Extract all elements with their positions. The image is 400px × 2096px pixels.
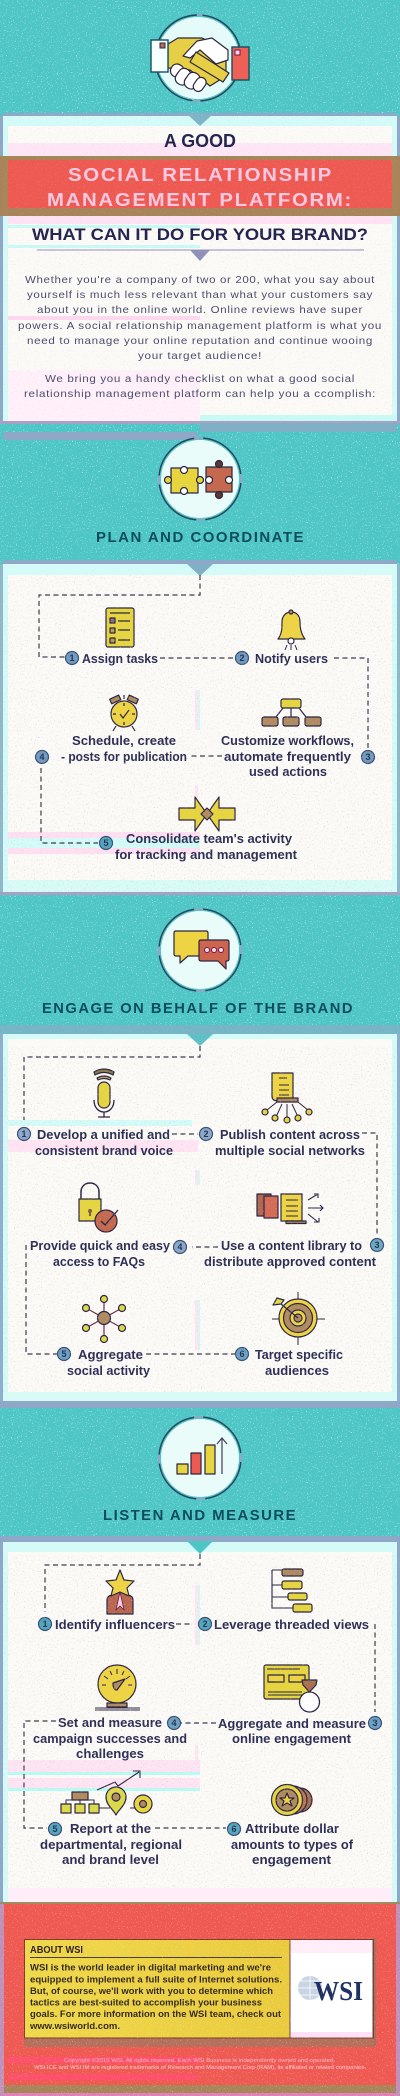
label: report at the departmental level: [40, 1821, 182, 1867]
text block: introduction: relationship management platform can help you a ccomplish:: [24, 388, 376, 400]
label: report at the departmental level: 5: [52, 1824, 58, 1834]
label: aggregate social activity: Aggregate: [78, 1347, 143, 1362]
text block: copyright: [34, 2057, 367, 2071]
heading: what can it do for your brand: [32, 225, 368, 261]
label: develop a unified brand voice: [18, 1127, 173, 1158]
banner: social relationship management platform: [0, 156, 400, 216]
label: aggregate social activity: social activity: [67, 1363, 151, 1378]
label: identify influencers: 1: [42, 1619, 48, 1629]
icon: handshake: [151, 11, 249, 105]
label: target specific audiences: audiences: [265, 1363, 329, 1378]
label: customize workflows: 3: [365, 752, 371, 762]
label: customize workflows: used actions: [249, 764, 327, 779]
label: attribute dollar amounts: engagement: [252, 1852, 332, 1867]
label: attribute dollar amounts: Attribute dollar: [245, 1821, 339, 1836]
connector: listen and measure: [24, 1554, 375, 1828]
icon: rising bar chart: [155, 1413, 245, 1503]
label: consolidate team's activity: 5: [103, 838, 109, 848]
label: provide quick and easy access: [30, 1238, 186, 1269]
label: leverage threaded views: 2: [202, 1619, 208, 1629]
label: attribute dollar amounts: [228, 1821, 354, 1867]
label: consolidate team's activity: for tracking and management: [115, 847, 298, 862]
label: target specific audiences: Target specific: [255, 1347, 343, 1362]
panel: footer: [0, 1902, 400, 2096]
text block: introduction: Whether you're a company of two or 200, what you say about: [25, 274, 375, 286]
label: aggregate social activity: [58, 1347, 151, 1378]
heading: plan and coordinate: PLAN AND COORDINATE: [96, 529, 305, 546]
label: publish content: multiple social networks: [215, 1143, 365, 1158]
icon: social hub: [82, 1296, 126, 1342]
icon: dollar coins: [272, 1784, 312, 1816]
banner: social relationship management platform: SOCIAL RELATIONSHIP: [68, 165, 333, 185]
connector: engage on behalf of the brand: [24, 1046, 377, 1354]
label: aggregate and measure: online engagement: [232, 1731, 352, 1746]
label: identify influencers: Identify influencers: [55, 1617, 175, 1632]
label: customize workflows: automate frequently: [224, 749, 352, 764]
label: leverage threaded views: Leverage threaded views: [214, 1617, 369, 1632]
panel: plan and coordinate: [0, 560, 400, 895]
icon: padlock with check: [79, 1183, 118, 1232]
heading: engage on behalf of the brand: ENGAGE ON BEHALF OF THE BRAND: [42, 1000, 354, 1017]
text block: introduction: about you in the online world. Online reviews have super: [37, 304, 363, 316]
label: publish content: 2: [203, 1129, 209, 1139]
icon: consolidating arrows: [179, 797, 235, 831]
label: set and measure: Set and measure: [58, 1715, 162, 1730]
label: customize workflows: [221, 733, 374, 779]
callout: about wsi: equipped to implement a full suite of Internet solutions.: [30, 1974, 282, 1986]
panel: engage on behalf of the brand: [0, 1025, 400, 1408]
label: report at the departmental level: Report at the: [70, 1821, 151, 1836]
label: provide quick and easy access: Provide quick and easy: [30, 1238, 171, 1253]
label: assign tasks: 1: [69, 653, 75, 663]
label: provide quick and easy access: access to FAQs: [53, 1254, 145, 1269]
label: set and measure: campaign successes and: [33, 1731, 187, 1746]
label: attribute dollar amounts: 6: [231, 1824, 237, 1834]
icon: chat bubbles: [155, 905, 245, 995]
label: schedule, create posts: - posts for publication: [61, 749, 187, 764]
connector: plan and coordinate: [39, 575, 368, 843]
icon: content library: [257, 1194, 323, 1224]
text block: introduction: yourself is much less relevant than what your customers say: [27, 289, 373, 301]
banner: social relationship management platform: MANAGEMENT PLATFORM:: [47, 190, 353, 210]
label: schedule, create posts: 4: [39, 752, 45, 762]
heading: listen and measure: LISTEN AND MEASURE: [103, 1507, 297, 1524]
callout: about wsi: [24, 1940, 374, 2038]
label: set and measure: [33, 1715, 187, 1761]
icon: microphone: [94, 1069, 114, 1117]
text block: introduction: need to manage your online reputation and continue wooing: [27, 335, 373, 347]
label: use a content library: distribute approved content: [204, 1254, 377, 1269]
text block: introduction: We bring you a handy checklist on what a good social: [45, 373, 355, 385]
text block: copyright: WSI ICE and WSI IM are registered trademarks of Research and Management Corp (RAM), its affiliated or related companies.: [34, 2065, 367, 2071]
icon: target with arrow: [272, 1292, 325, 1345]
label: assign tasks: Assign tasks: [82, 651, 158, 666]
heading: what can it do for your brand: WHAT CAN IT DO FOR YOUR BRAND?: [32, 225, 368, 244]
text block: introduction: [18, 274, 382, 400]
icon: workflow chart: [262, 699, 321, 726]
label: target specific audiences: [236, 1347, 343, 1378]
label: consolidate team's activity: Consolidate team's activity: [126, 831, 293, 846]
icon: threaded view: [272, 1569, 312, 1612]
logo: wsi: [290, 1940, 373, 2038]
icon: star influencer: [106, 1570, 134, 1614]
label: develop a unified brand voice: consistent brand voice: [35, 1143, 173, 1158]
icon: publishing document: [262, 1073, 312, 1123]
icon: checklist: [106, 608, 134, 647]
label: aggregate and measure: 3: [372, 1718, 378, 1728]
panel: introduction: [0, 113, 400, 424]
label: publish content: Publish content across: [220, 1127, 360, 1142]
heading: a good: A GOOD: [164, 131, 236, 151]
label: report at the departmental level: departmental, regional: [40, 1837, 182, 1852]
label: attribute dollar amounts: amounts to types of: [231, 1837, 354, 1852]
label: aggregate social activity: 5: [61, 1349, 67, 1359]
label: aggregate and measure: [218, 1716, 382, 1746]
icon: alarm clock: [110, 695, 138, 731]
label: customize workflows: Customize workflows,: [221, 733, 354, 748]
callout: about wsi: www.wsiworld.com.: [29, 2021, 120, 2032]
logo: wsi: WSI: [314, 1976, 363, 2006]
icon: bell: [278, 610, 305, 650]
callout: about wsi: ABOUT WSI: [30, 1945, 83, 1956]
icon: puzzle pieces: [3, 423, 397, 524]
callout: about wsi: goals. For more information on the WSI team, check out: [30, 2009, 282, 2020]
label: target specific audiences: 6: [239, 1349, 245, 1359]
label: consolidate team's activity: [100, 831, 298, 862]
text block: copyright: Copyright ©2015 WSI. All rights reserved. Each WSI Business is independently owned and operated.: [64, 2057, 336, 2064]
label: notify users: Notify users: [255, 651, 328, 666]
panel: listen and measure: [0, 1536, 400, 1902]
label: set and measure: 4: [171, 1718, 177, 1728]
icon: webpage with ring: [264, 1665, 320, 1712]
text block: introduction: powers. A social relationship management platform is what you: [18, 320, 382, 332]
text block: introduction: your target audience!: [138, 350, 262, 362]
callout: about wsi: WSI is the world leader in digital marketing and we're: [30, 1962, 271, 1974]
label: schedule, create posts: Schedule, create: [72, 733, 176, 748]
label: use a content library: [204, 1238, 384, 1269]
label: develop a unified brand voice: 1: [21, 1129, 27, 1139]
label: use a content library: 3: [374, 1240, 380, 1250]
callout: about wsi: But, of course, we'll work with you to determine which: [30, 1986, 273, 1997]
label: aggregate and measure: Aggregate and measure: [218, 1716, 366, 1731]
label: schedule, create posts: [36, 733, 187, 764]
label: develop a unified brand voice: Develop a unified and: [37, 1127, 170, 1142]
callout: about wsi: tactics are best-suited to accomplish your business: [30, 1998, 262, 2008]
label: provide quick and easy access: 4: [177, 1242, 183, 1252]
label: use a content library: Use a content library to: [221, 1238, 362, 1253]
label: set and measure: challenges: [76, 1746, 144, 1761]
icon: gauge: [95, 1665, 140, 1710]
label: report at the departmental level: and brand level: [62, 1852, 159, 1867]
label: notify users: 2: [239, 653, 245, 663]
icon: regional report: [61, 1771, 152, 1815]
label: publish content: [200, 1127, 365, 1158]
